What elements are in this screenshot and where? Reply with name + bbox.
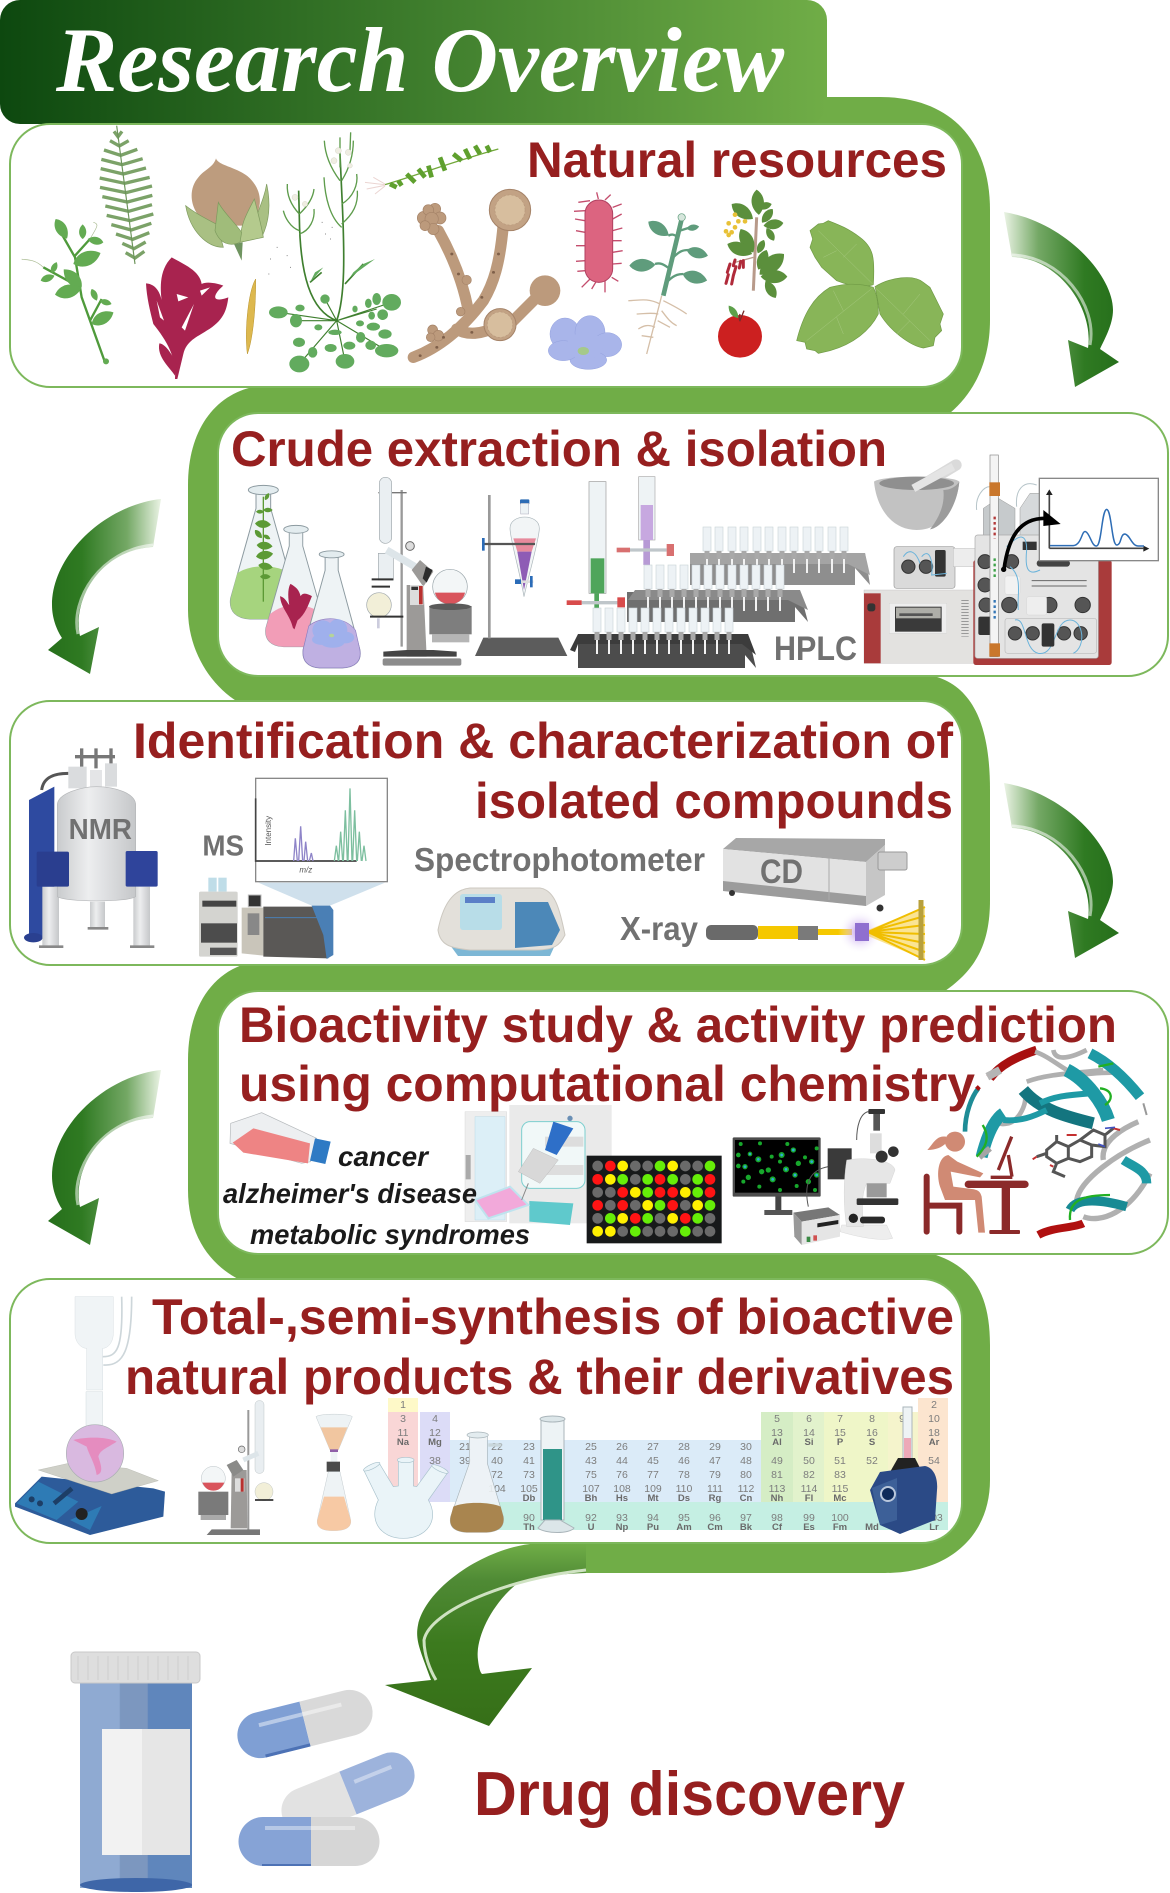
periodic table background: 78: [678, 1469, 690, 1481]
periodic table background: 49: [771, 1455, 783, 1467]
periodic table background: 96: [709, 1512, 721, 1524]
chart: mass spectrum: Intensity: [264, 816, 273, 846]
periodic table background: 107: [582, 1483, 600, 1495]
label: MS: MS: [202, 831, 244, 863]
icon: filter funnel on flask: [316, 1414, 352, 1531]
periodic table background: 104: [488, 1483, 506, 1495]
periodic table background: 2: [931, 1399, 937, 1411]
icon: vortex mixer: [870, 1407, 937, 1534]
periodic table background: Pu: [647, 1522, 659, 1533]
icon: circular dichroism spectrometer: [723, 838, 907, 912]
panel: bioactivity study: [218, 991, 1168, 1254]
chart: mass spectrum: [256, 778, 387, 906]
periodic table background: 94: [647, 1512, 659, 1524]
periodic table background: 114: [801, 1483, 818, 1495]
periodic table background: 80: [740, 1469, 752, 1481]
periodic table background: [388, 1398, 948, 1533]
periodic table background: 16: [866, 1427, 878, 1439]
heading: natural resources: Natural resources: [527, 132, 947, 188]
icon: capsule top: [232, 1685, 378, 1763]
periodic table background: 112: [738, 1483, 755, 1495]
plants and microbes illustration, left group: [22, 126, 560, 379]
icon: microscope: [807, 1109, 899, 1239]
arrow: left arrow 1: [48, 499, 161, 674]
NMR and MS instruments group: [24, 748, 387, 959]
icon: arabidopsis plant: [268, 132, 401, 372]
icon: researcher at desk: [927, 1132, 1025, 1234]
periodic table background: 99: [803, 1512, 815, 1524]
periodic table background: 79: [709, 1469, 721, 1481]
periodic table background: 22: [491, 1441, 503, 1453]
heading: identification and characterization: Identification & characterization of: [133, 713, 953, 769]
icon: graduated cylinder: [538, 1416, 574, 1532]
icon: flask with red algae: [266, 525, 326, 647]
periodic table background: Bh: [585, 1493, 598, 1504]
periodic table background: Es: [803, 1522, 815, 1533]
periodic table background: 6: [806, 1413, 812, 1425]
periodic table background: 3: [400, 1413, 406, 1425]
arrow: right arrow 1: [1004, 212, 1119, 387]
periodic table background: Al: [772, 1437, 782, 1448]
icon: apple: [718, 306, 762, 358]
periodic table background: 95: [678, 1512, 690, 1524]
periodic table background: 11: [398, 1427, 409, 1439]
periodic table background: 44: [616, 1455, 628, 1467]
periodic table background: Cm: [707, 1522, 723, 1533]
periodic table background: U: [588, 1522, 595, 1533]
icon: incubator and pipette: [465, 1105, 612, 1225]
icon: mortar and pestle: [874, 465, 959, 530]
periodic table background: 108: [613, 1483, 631, 1495]
lab glassware group: [230, 477, 674, 668]
label: X-ray: X-ray: [620, 910, 699, 947]
periodic table background: 97: [740, 1512, 752, 1524]
periodic table background: 111: [707, 1483, 723, 1495]
periodic table background: 105: [520, 1483, 538, 1495]
icon: strawberry leaves: [797, 221, 943, 353]
periodic table background: 10: [928, 1413, 940, 1425]
icon: spectrophotometer: [438, 888, 565, 956]
periodic table background: 83: [834, 1469, 846, 1481]
periodic table background: 103: [925, 1512, 943, 1524]
periodic table background: 45: [647, 1455, 659, 1467]
icon: bottles and column: [976, 484, 1043, 537]
periodic table background: Mt: [647, 1493, 659, 1504]
icon: NMR magnet: [24, 748, 158, 947]
periodic table background: 98: [771, 1512, 783, 1524]
periodic table background: 13: [771, 1427, 783, 1439]
disease labels: alzheimer's disease: [223, 1178, 477, 1209]
heading: bioactivity study: using computational chemistry: [239, 1056, 975, 1112]
periodic table background: 115: [832, 1483, 849, 1495]
title banner: Research Overview: [55, 9, 785, 111]
periodic table background: Fl: [805, 1493, 813, 1504]
periodic table background: Db: [523, 1493, 536, 1504]
icon: monitor with cell image: [733, 1137, 821, 1215]
chart: well plate heatmap: [587, 1156, 722, 1243]
periodic table background: Cf: [772, 1522, 783, 1533]
icon: moss sprig: [365, 146, 498, 194]
periodic table background: 50: [803, 1455, 815, 1467]
icon: pea plant: [22, 216, 116, 364]
periodic table background: Na: [397, 1437, 410, 1448]
arrow: large arrow to drug discovery: [385, 1544, 586, 1726]
icon: barberry branch: [724, 189, 789, 300]
disease labels: [223, 1141, 530, 1250]
periodic table background: 54: [928, 1455, 940, 1467]
icon: rotary evaporator small: [198, 1401, 273, 1535]
icon: x-ray diffraction setup: [706, 900, 925, 960]
periodic table background: 73: [523, 1469, 535, 1481]
heading: bioactivity study: Bioactivity study & activity prediction: [239, 997, 1117, 1053]
periodic table background: Lr: [929, 1522, 939, 1533]
periodic table background: 81: [771, 1469, 783, 1481]
periodic table background: 72: [491, 1469, 503, 1481]
synthesis glassware group: [15, 1297, 504, 1538]
disease labels: metabolic syndromes: [250, 1219, 530, 1250]
periodic table background: 23: [523, 1441, 535, 1453]
periodic table background: 40: [491, 1455, 503, 1467]
icon: hot plate stirrer with flask: [15, 1297, 165, 1535]
icon: capsule middle: [274, 1745, 422, 1841]
label: NMR: NMR: [69, 814, 132, 846]
icon: flask with plant: [230, 485, 296, 619]
panel: natural resources: [10, 124, 962, 387]
icon: red algae: [146, 257, 228, 379]
periodic table background: 113: [769, 1483, 786, 1495]
panel: identification and characterization: [10, 701, 962, 965]
periodic table background: 1: [400, 1399, 406, 1411]
icon: bacillus: [574, 192, 623, 292]
periodic table background: 14: [803, 1427, 815, 1439]
periodic table background: 82: [803, 1469, 815, 1481]
periodic table background: 92: [585, 1512, 597, 1524]
chart: chromatogram: [1039, 478, 1158, 561]
label: CD: CD: [760, 853, 803, 891]
periodic table background: Nh: [771, 1493, 784, 1504]
icon: fraction collector racks: [570, 527, 870, 668]
periodic table background: 109: [644, 1483, 662, 1495]
icon: fungus: [413, 189, 560, 357]
heading: drug discovery: Drug discovery: [474, 1760, 905, 1829]
arrow: signal to chromatogram: [1001, 510, 1061, 572]
periodic table background: 4: [432, 1413, 438, 1425]
icon: seed pod: [246, 279, 256, 354]
icon: purification system: [973, 455, 1112, 665]
heading: total and semi synthesis: Total-,semi-synthesis of bioactive: [152, 1289, 954, 1345]
periodic table background: Ds: [678, 1493, 690, 1504]
periodic table background: Am: [676, 1522, 692, 1533]
periodic table background: Th: [523, 1522, 535, 1533]
periodic table background: Hs: [616, 1493, 628, 1504]
periodic table background: 38: [429, 1455, 441, 1467]
periodic table background: 29: [709, 1441, 721, 1453]
microbes and plants illustration, right group: [548, 189, 943, 369]
icon: capsule bottom: [238, 1817, 380, 1866]
periodic table background: 27: [647, 1441, 659, 1453]
cell culture equipment group: [230, 1105, 722, 1243]
icon: chromatography columns: [567, 477, 674, 610]
periodic table background: Si: [805, 1437, 813, 1448]
periodic table background: 21: [459, 1441, 471, 1453]
periodic table background: 52: [866, 1455, 878, 1467]
periodic table background: 93: [616, 1512, 628, 1524]
icon: fern stem: [117, 126, 135, 264]
periodic table background: 43: [585, 1455, 597, 1467]
icon: erlenmeyer flask with side arm: [450, 1432, 504, 1532]
periodic table background: 18: [928, 1427, 940, 1439]
periodic table background: P: [837, 1437, 844, 1448]
icon: protein-ligand structure: [965, 1050, 1150, 1235]
icon: three-neck flask: [363, 1457, 449, 1538]
periodic table background: 100: [831, 1512, 849, 1524]
icon: separating funnel on stand: [475, 495, 567, 656]
green serpentine band: [188, 97, 990, 1573]
periodic table background: 48: [740, 1455, 752, 1467]
arrow: right arrow 2: [1004, 783, 1119, 958]
microscope, researcher and protein group: [733, 1050, 1150, 1245]
disease labels: cancer: [338, 1141, 430, 1172]
periodic table background: 25: [585, 1441, 597, 1453]
periodic table background: 5: [774, 1413, 780, 1425]
label: HPLC: HPLC: [774, 630, 857, 668]
icon: blue flower: [548, 316, 622, 369]
periodic table background: Cn: [740, 1493, 753, 1504]
periodic table background: 12: [429, 1427, 441, 1439]
label: Spectrophotometer: Spectrophotometer: [414, 841, 705, 878]
periodic table background: Mg: [428, 1437, 442, 1448]
panel: total and semi synthesis: [10, 1279, 962, 1543]
periodic table background: Bk: [740, 1522, 753, 1533]
icon: seedling: [628, 214, 709, 354]
periodic table background: 76: [616, 1469, 628, 1481]
periodic table background: 41: [523, 1455, 535, 1467]
periodic table background: 28: [678, 1441, 690, 1453]
icon: LC-MS instrument: [199, 878, 333, 959]
arrow: left arrow 2: [48, 1070, 161, 1245]
periodic table background: 75: [585, 1469, 597, 1481]
periodic table background: 39: [459, 1455, 471, 1467]
heading: total and semi synthesis: natural products & their derivatives: [125, 1349, 954, 1405]
icon: controller box: [793, 1207, 840, 1245]
periodic table background: 47: [709, 1455, 721, 1467]
HPLC instrument group: [864, 455, 1158, 665]
periodic table background: 30: [740, 1441, 752, 1453]
periodic table background: 77: [647, 1469, 659, 1481]
periodic table background: 7: [837, 1413, 843, 1425]
periodic table background: 46: [678, 1455, 690, 1467]
periodic table background: Fm: [833, 1522, 847, 1533]
periodic table background: Mc: [833, 1493, 847, 1504]
icon: pill bottle: [71, 1652, 200, 1892]
icon: seed bud: [186, 158, 269, 261]
periodic table background: 8: [869, 1413, 875, 1425]
periodic table background: Np: [616, 1522, 629, 1533]
icon: culture flask: [230, 1113, 331, 1164]
icon: rotary evaporator: [367, 477, 472, 666]
periodic table background: 26: [616, 1441, 628, 1453]
icon: preparative instrument: [864, 547, 977, 663]
chart: mass spectrum: m/z: [299, 865, 312, 874]
periodic table background: Ar: [929, 1437, 940, 1448]
periodic table background: 51: [834, 1455, 846, 1467]
periodic table background: 9: [899, 1413, 905, 1425]
periodic table background: Rg: [709, 1493, 722, 1504]
heading: identification and characterization: isolated compounds: [475, 773, 953, 829]
icon: flask with flower: [303, 551, 360, 668]
icon: fern: [100, 131, 153, 258]
periodic table background: Md: [865, 1522, 879, 1533]
heading: crude extraction and isolation: Crude extraction & isolation: [231, 421, 887, 477]
periodic table background: 15: [834, 1427, 846, 1439]
periodic table background: 110: [676, 1483, 693, 1495]
panel: crude extraction and isolation: [218, 413, 1168, 676]
periodic table background: 90: [523, 1512, 535, 1524]
periodic table background: S: [869, 1437, 875, 1448]
